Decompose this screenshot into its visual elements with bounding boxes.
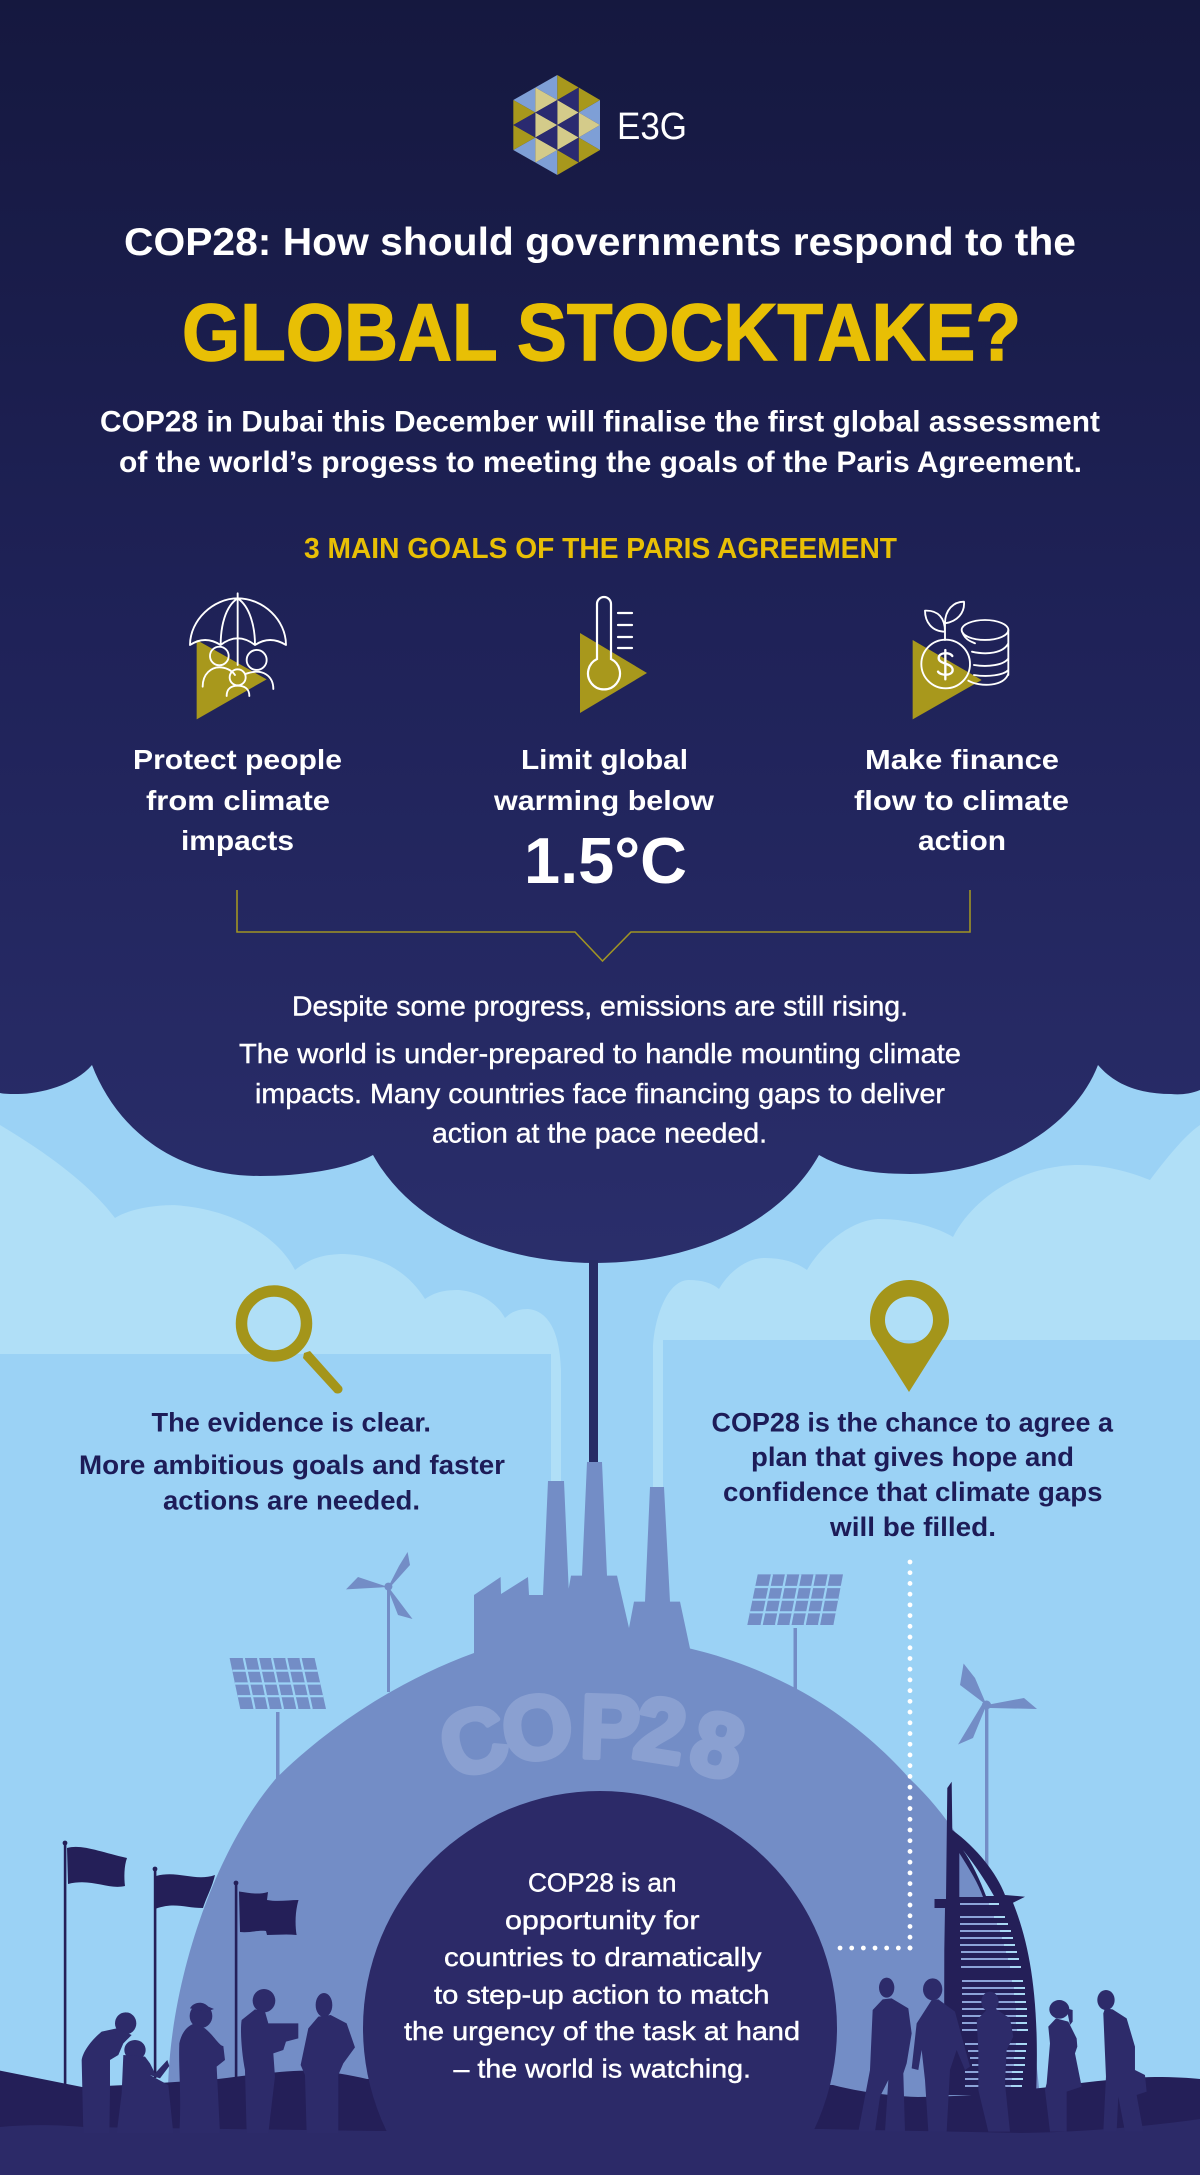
circle text: COP28 is an: [528, 1868, 676, 1898]
person walking 1: [858, 1978, 912, 2132]
circle text: – the world is watching.: [454, 2054, 751, 2084]
intro paragraph: of the world’s progess to meeting the goals of the Paris Agreement.: [119, 446, 1082, 479]
cloud text: [239, 990, 961, 1148]
circle text: the urgency of the task at hand: [404, 2016, 800, 2046]
text: COP28 is the chance: confidence that climate gaps: [723, 1477, 1102, 1507]
dark header and storm cloud: [0, 0, 1200, 1263]
text: COP28 is the chance: will be filled.: [829, 1512, 996, 1542]
light cloud right: [653, 1125, 1200, 1487]
flags: [63, 1841, 298, 2087]
circle text: [404, 1868, 800, 2084]
goal 1 text: [133, 744, 342, 856]
dotted connector line: [840, 1562, 910, 1948]
text: the evidence is clear: [79, 1408, 505, 1516]
woman with bag: [1045, 2000, 1082, 2132]
goal 2 text: Limit global: [521, 744, 688, 775]
goal 1 text: impacts: [181, 825, 294, 856]
main heading: GLOBAL STOCKTAKE?: [182, 288, 1021, 378]
goal 3 text: Make finance: [865, 744, 1059, 775]
person standing: [301, 1993, 355, 2133]
flag 1: [63, 1841, 127, 2087]
solar panel left: [230, 1658, 326, 1780]
text: COP28 is the chance: [712, 1408, 1113, 1542]
icon: umbrella over family: [190, 593, 286, 719]
person seated in wheelchair: [117, 2040, 173, 2133]
goal 3 text: [854, 744, 1069, 856]
flag 3: [234, 1881, 298, 2082]
person walking 2: [912, 1978, 970, 2132]
central dark circle: [363, 1791, 837, 2175]
goal 1: protect people: [133, 593, 342, 856]
section heading: 3 main goals: 3 MAIN GOALS OF THE PARIS AGREEMENT: [304, 533, 898, 565]
flag 2: [153, 1867, 215, 2078]
Burj Al Arab tower: [934, 1782, 1037, 2095]
goal 1 text: Protect people: [133, 744, 342, 775]
circle text: opportunity for: [505, 1905, 700, 1935]
wind turbine right: [958, 1664, 1037, 1900]
goal 3: make finance flow: [854, 602, 1069, 856]
light cloud left: [0, 1125, 561, 1481]
cloud text: The world is under-prepared to handle mounting climate: [239, 1038, 961, 1069]
person leaning: [82, 2012, 136, 2133]
goal 2: limit warming: [493, 597, 714, 897]
bracket arrow: [237, 890, 970, 961]
man with briefcase: [1097, 1990, 1147, 2132]
text: the evidence is clear: The evidence is clear.: [152, 1408, 431, 1438]
intro paragraph: COP28 in Dubai this December will finalise the first global assessment: [100, 406, 1100, 438]
goal 2 text: [493, 744, 714, 897]
icon: coins and plant: [913, 602, 1008, 719]
person in cap: [179, 2003, 225, 2133]
goal 2 text: warming below: [493, 785, 714, 816]
person in front of tower: [977, 1992, 1013, 2132]
logo: E3G: [513, 75, 687, 175]
text: COP28 is the chance: plan that gives hope and: [751, 1442, 1074, 1472]
icon: location pin: [870, 1280, 949, 1392]
sky background: [0, 1000, 1200, 2175]
goal 2 text: 1.5°C: [524, 824, 687, 897]
title line: COP28: How should governments respond to the: [124, 221, 1076, 264]
COP28 dome with factory: [168, 1462, 1040, 2100]
goal 1 text: from climate: [146, 785, 330, 816]
COP28 lettering on dome: COP28: [429, 1674, 754, 1801]
logo: E3G: E3G: [617, 106, 687, 148]
circle text: to step-up action to match: [434, 1980, 770, 2010]
goal 3 text: flow to climate: [854, 785, 1069, 816]
intro paragraph: [100, 406, 1100, 479]
text: the evidence is clear: actions are needed.: [163, 1486, 420, 1516]
wind turbine left: [346, 1552, 412, 1692]
goal 3 text: action: [918, 825, 1006, 856]
chimney smoke line: [589, 1260, 598, 1464]
text: COP28 is the chance: COP28 is the chance to agree a: [712, 1408, 1113, 1438]
cloud text: impacts. Many countries face financing gaps to deliver: [255, 1078, 945, 1109]
person reading: [241, 1989, 298, 2133]
cloud text: action at the pace needed.: [432, 1118, 767, 1148]
foreground ground: [0, 2119, 1200, 2175]
text: the evidence is clear: More ambitious goals and faster: [79, 1450, 505, 1480]
icon: magnifying glass: [242, 1291, 343, 1394]
icon: thermometer: [580, 597, 647, 713]
people right group: [858, 1978, 1147, 2132]
solar panel right: [747, 1574, 843, 1690]
cloud text: Despite some progress, emissions are still rising.: [292, 990, 908, 1022]
circle text: countries to dramatically: [444, 1942, 762, 1972]
dark hill band: [0, 2071, 1200, 2140]
people left group: [82, 1989, 355, 2133]
